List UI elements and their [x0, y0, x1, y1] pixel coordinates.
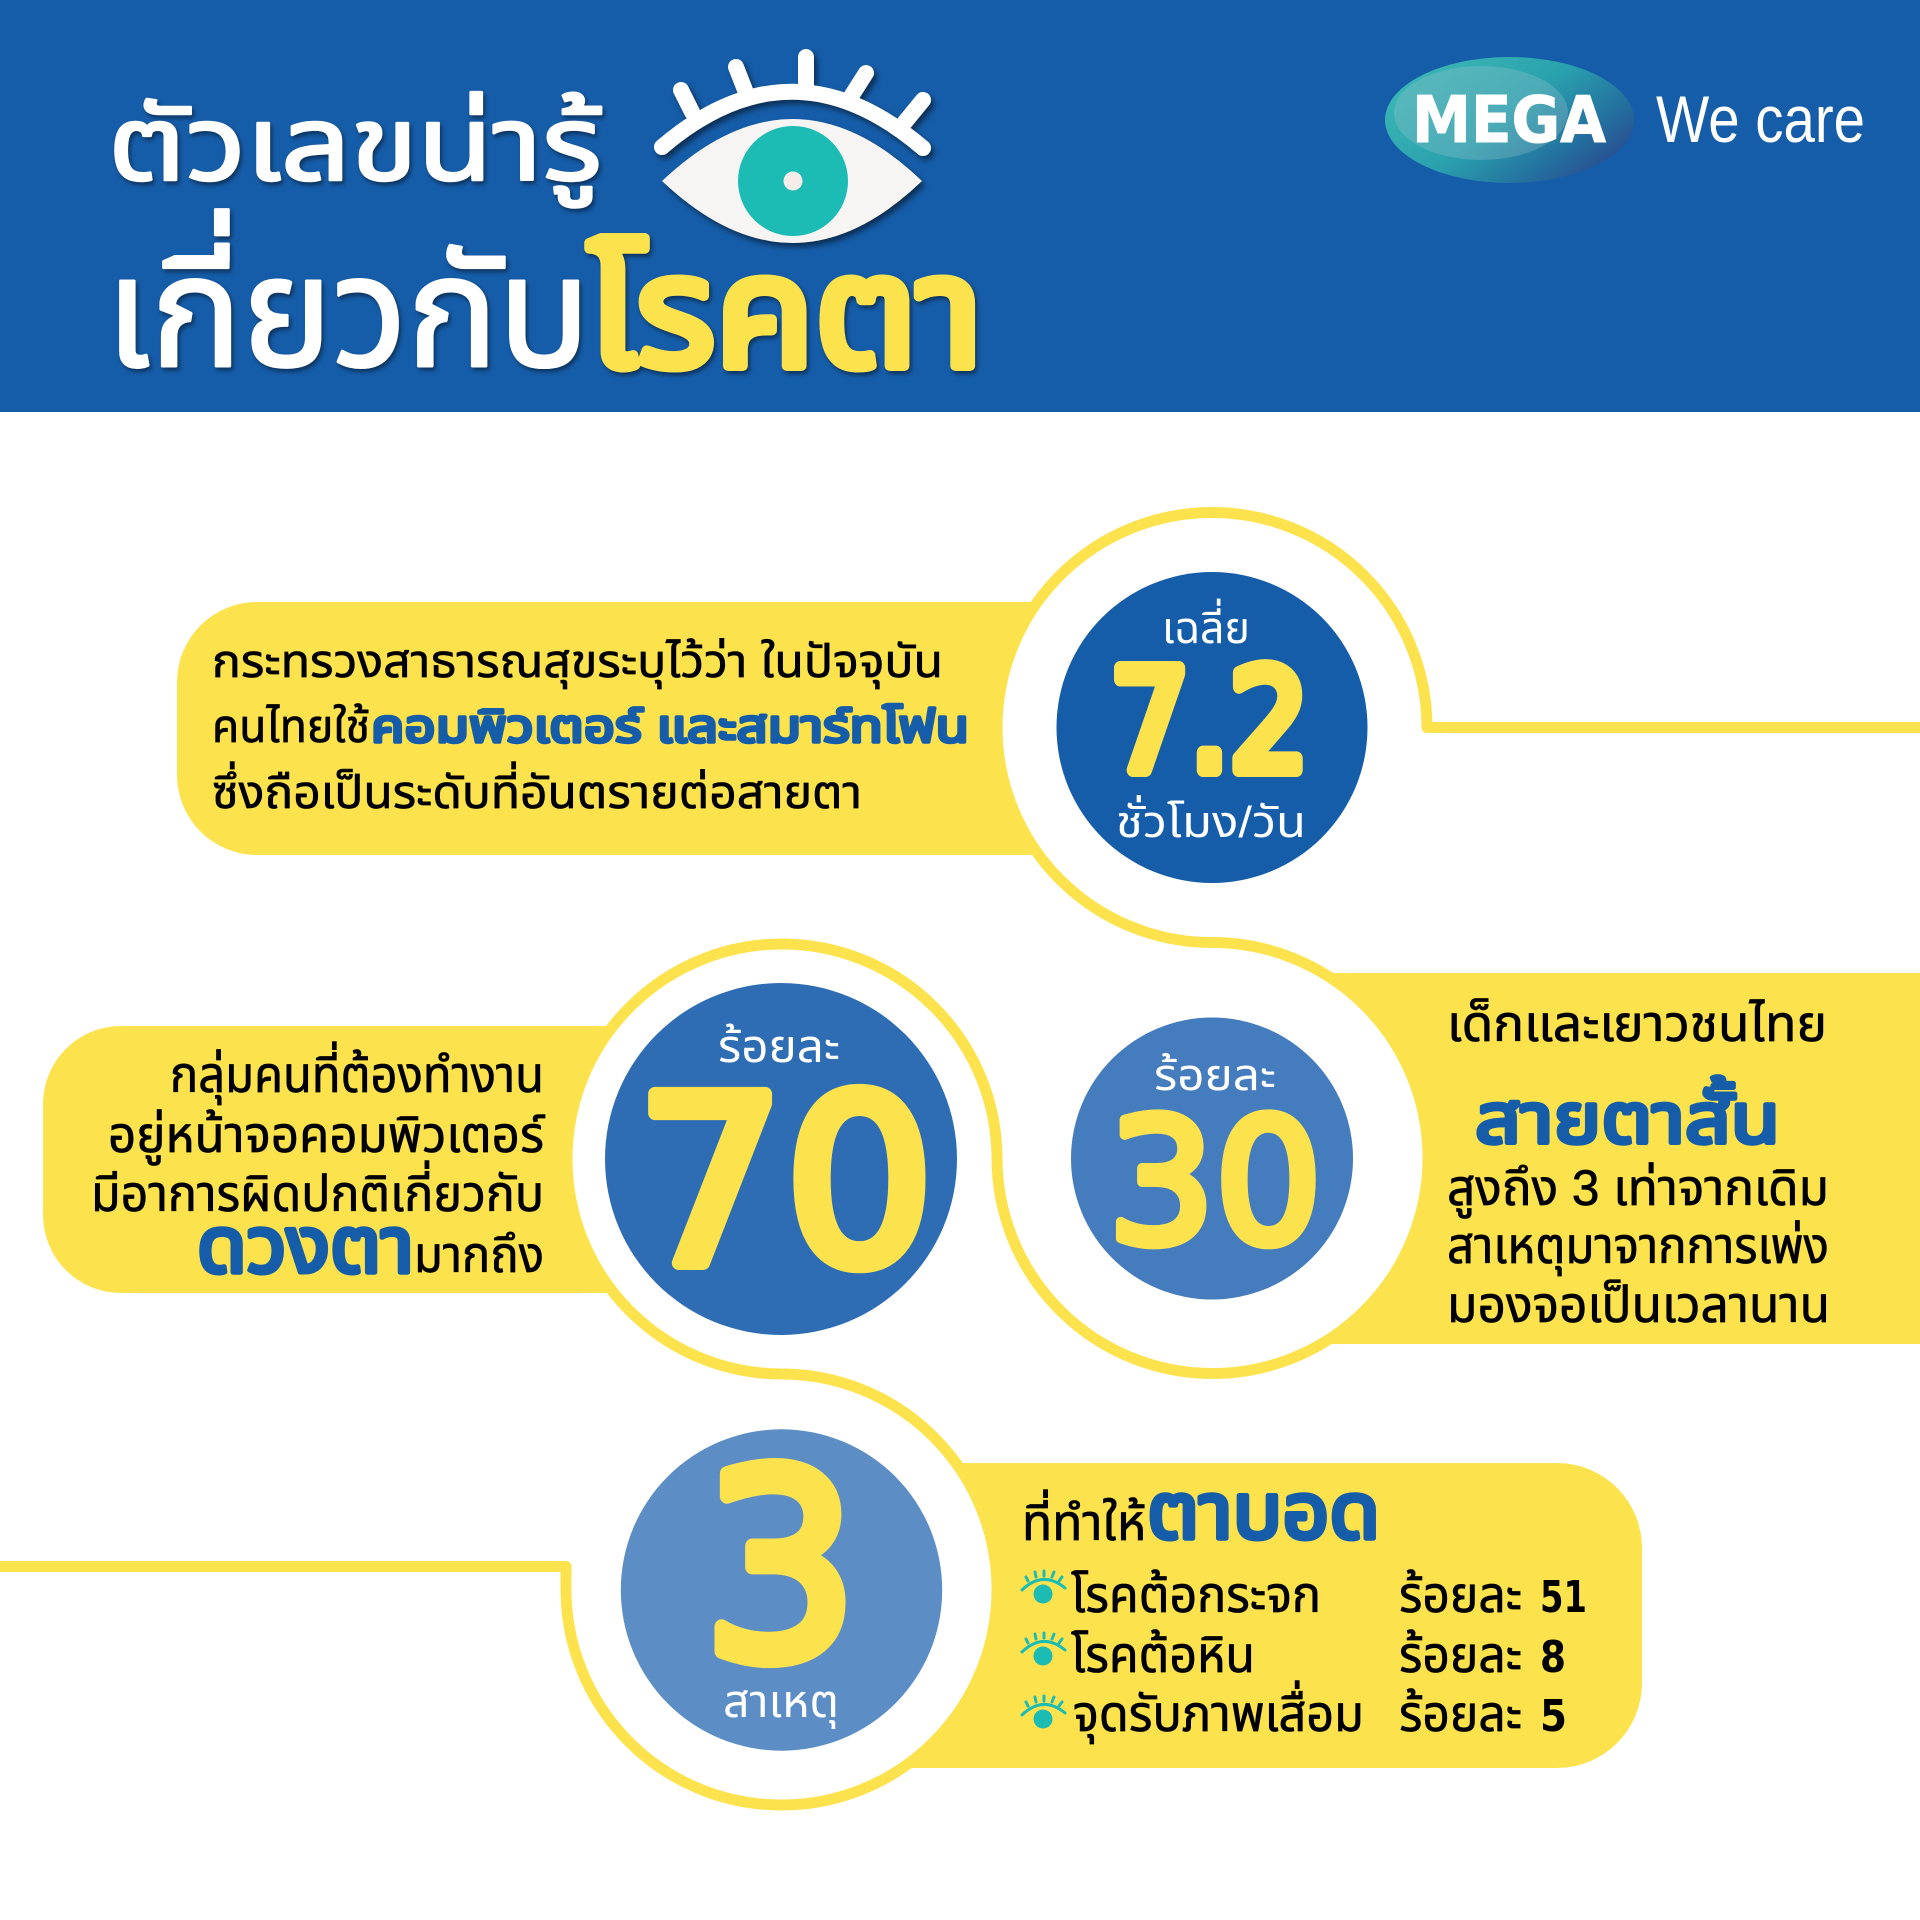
title: ตัวเลขน่ารู้ — [108, 87, 602, 208]
row: glaucoma — [1071, 1627, 1566, 1683]
row: cataract — [1071, 1567, 1587, 1623]
logo: MEGA We care — [1385, 57, 1865, 183]
stat circle: 3 causes: สาเหตุ — [723, 1675, 839, 1729]
text: nearsighted youth: มองจอเป็นเวลานาน — [1447, 1277, 1830, 1333]
text: nearsighted youth: สายตาสั้น — [1475, 1076, 1780, 1158]
row: glaucoma: 8 — [1540, 1632, 1566, 1683]
row: macular degeneration — [1073, 1680, 1567, 1744]
text: office workers: ดวงตา — [197, 1201, 414, 1289]
title: โรคตา — [588, 226, 983, 399]
text: office workers: มีอาการผิดปกติเกี่ยวกับ — [91, 1160, 544, 1222]
text: office workers: กลุ่มคนที่ต้องทำงาน — [170, 1041, 544, 1105]
row: cataract: โรคต้อกระจก — [1071, 1567, 1321, 1623]
row: glaucoma: โรคต้อหิน — [1071, 1627, 1255, 1683]
stat circle: 7.2 hours per day: 7.2 — [1110, 641, 1309, 804]
text: office workers — [91, 1041, 545, 1289]
icon: small eye 1 — [1022, 1571, 1065, 1604]
text: office workers: มากถึง — [414, 1227, 544, 1283]
text: computer usage: กระทรวงสาธารณสุขระบุไว้ว่า ในปัจจุบัน — [212, 635, 943, 689]
title — [106, 87, 983, 399]
icon: eye — [662, 57, 923, 243]
icon: small eye 2 — [1022, 1633, 1065, 1666]
stat circle: 70 percent — [605, 983, 957, 1335]
stat circle: 3 causes: 3 — [703, 1418, 858, 1718]
icon: small eye 3 — [1022, 1696, 1065, 1728]
text: nearsighted youth — [1447, 996, 1830, 1333]
stat circle: 7.2 hours per day: เฉลี่ย — [1162, 598, 1250, 653]
row: cataract: 51 — [1540, 1572, 1587, 1623]
text: computer usage: คอมพิวเตอร์ และสมาร์ทโฟน — [371, 700, 969, 752]
row: macular degeneration: ร้อยละ — [1399, 1686, 1522, 1742]
text: nearsighted youth: สาเหตุมาจากการเพ่ง — [1447, 1218, 1829, 1276]
stat circle: 3 causes — [621, 1418, 942, 1751]
panel: yellow boxes — [43, 602, 1920, 1768]
title: เกี่ยวกับ — [106, 209, 590, 399]
white discs behind the rings — [567, 512, 1427, 1805]
text: nearsighted youth: สูงถึง 3 เท่าจากเดิม — [1447, 1160, 1829, 1218]
stat circle: 30 percent: ร้อยละ — [1154, 1051, 1276, 1100]
stat circle: 30 percent — [1071, 1018, 1353, 1300]
row: glaucoma: ร้อยละ — [1399, 1627, 1522, 1683]
stat circle: 70 percent: 70 — [636, 1048, 934, 1318]
connecting ribbon line — [0, 512, 1920, 1805]
stat circle: 30 percent: 30 — [1108, 1082, 1322, 1283]
row: cataract: ร้อยละ — [1399, 1567, 1522, 1623]
header band — [0, 0, 1920, 412]
stat circle: 7.2 hours per day: ชั่วโมง/วัน — [1116, 795, 1306, 847]
text: causes of blindness: ตาบอด — [1147, 1467, 1380, 1555]
row: macular degeneration: 5 — [1540, 1691, 1567, 1742]
text: computer usage: ซึ่งถือเป็นระดับที่อันตรายต่อสายตา — [212, 761, 862, 818]
text: causes of blindness: ที่ทำให้ — [1022, 1489, 1146, 1551]
text: computer usage — [212, 635, 969, 818]
stat circle: 7.2 hours per day — [1056, 572, 1368, 883]
text: office workers: อยู่หน้าจอคอมพิวเตอร์ — [108, 1107, 545, 1165]
logo: MEGA We care: MEGA — [1412, 84, 1606, 158]
stat circle: 70 percent: ร้อยละ — [718, 1020, 840, 1072]
text: nearsighted youth: เด็กและเยาวชนไทย — [1447, 996, 1827, 1052]
text: causes of blindness — [1022, 1467, 1587, 1744]
logo: MEGA We care: We care — [1656, 82, 1865, 156]
row: macular degeneration: จุดรับภาพเสื่อม — [1073, 1680, 1364, 1744]
text: computer usage: คนไทยใช้ — [212, 700, 370, 752]
